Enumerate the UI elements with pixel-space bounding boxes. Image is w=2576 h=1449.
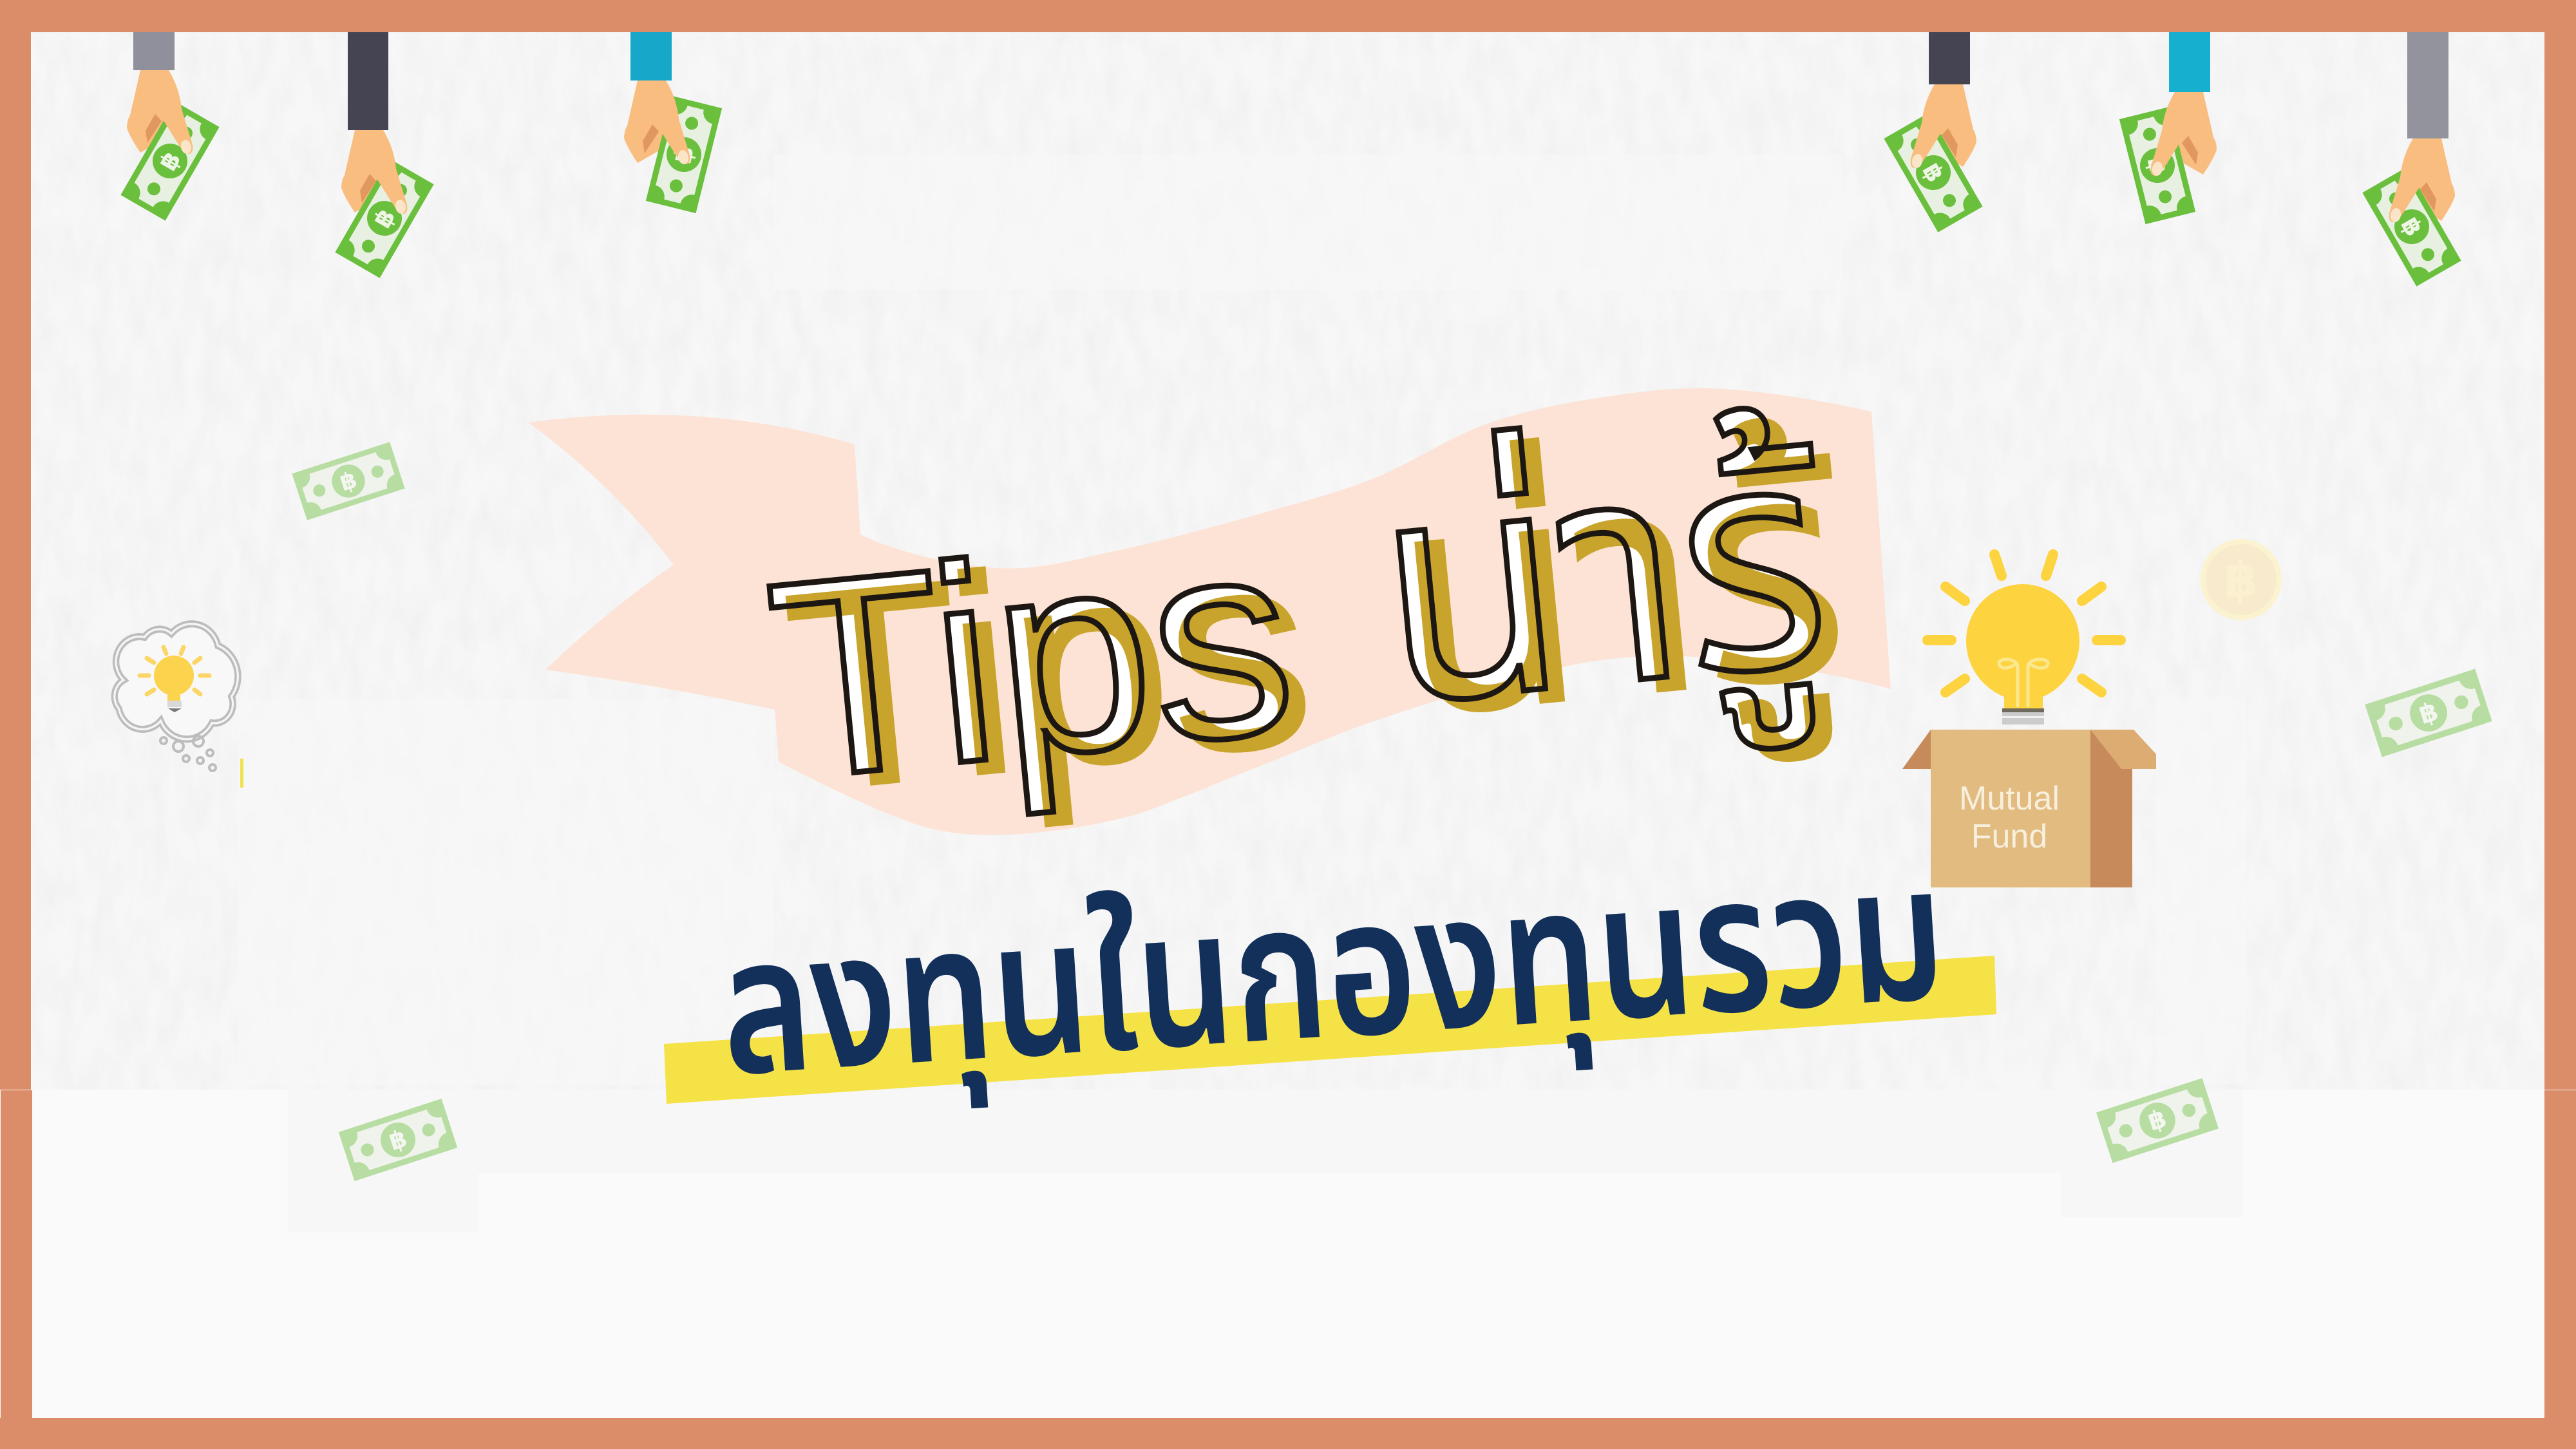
subtitle: ลงทุนในกองทุนรวม: ลงทุนในกองทุนรวม [713, 797, 1954, 1160]
faded banknote: lower left: ฿ [386, 1124, 410, 1156]
faded banknote: right: ฿ [2415, 696, 2442, 730]
hand 2 with banknote [335, 32, 434, 278]
banner: peach ribbon [528, 388, 1891, 835]
icon: bulb rays [1927, 554, 2121, 692]
label: Mutual Fund: Fund [1971, 818, 2047, 855]
coin: faded baht coin [2201, 539, 2282, 620]
hand 6 with banknote: ฿ [2395, 213, 2429, 241]
title word: น่ารู้: น่ารู้ [1359, 335, 1848, 842]
hand 4 with banknote: ฿ [1917, 158, 1950, 187]
title word: Tips: Tips [757, 477, 1305, 840]
hand 5 with banknote: ฿ [2141, 154, 2174, 177]
label: Mutual Fund [1959, 780, 2060, 855]
coin: faded baht coin: ฿ [2224, 551, 2258, 608]
icon: mutual fund box with light bulb [1902, 554, 2156, 887]
label: Mutual Fund: Mutual [1959, 780, 2060, 817]
hand 3 with banknote [624, 32, 722, 213]
faded banknote: upper left: ฿ [336, 466, 361, 497]
hand 2 with banknote: ฿ [368, 204, 401, 232]
title word: น่ารู้: น่ารู้ [1359, 335, 1848, 842]
faded banknote: lower right: ฿ [2145, 1104, 2170, 1137]
icon: cardboard box [1902, 730, 2156, 887]
highlight: yellow band [664, 956, 1996, 1104]
faded banknote: lower right [2096, 1078, 2219, 1163]
title word: น่ารู้: น่ารู้ [1378, 346, 1866, 853]
hand 6 with banknote [2362, 32, 2461, 287]
hand 4 with banknote [1884, 32, 1983, 232]
hand 5 with banknote [2119, 32, 2217, 224]
faded banknote: upper left [292, 442, 405, 520]
title word: Tips: Tips [775, 488, 1323, 851]
faded banknote: right [2365, 669, 2492, 757]
hand 3 with banknote: ฿ [668, 143, 700, 166]
icon: bulb [1966, 584, 2079, 724]
icon: thought cloud with bulb [115, 624, 243, 788]
title word: Tips: Tips [757, 477, 1305, 840]
faded banknote: lower left [339, 1099, 457, 1181]
hand 1 with banknote: ฿ [153, 147, 187, 175]
hand 1 with banknote [120, 32, 220, 221]
title: Tips น่ารู้ [757, 333, 1866, 855]
